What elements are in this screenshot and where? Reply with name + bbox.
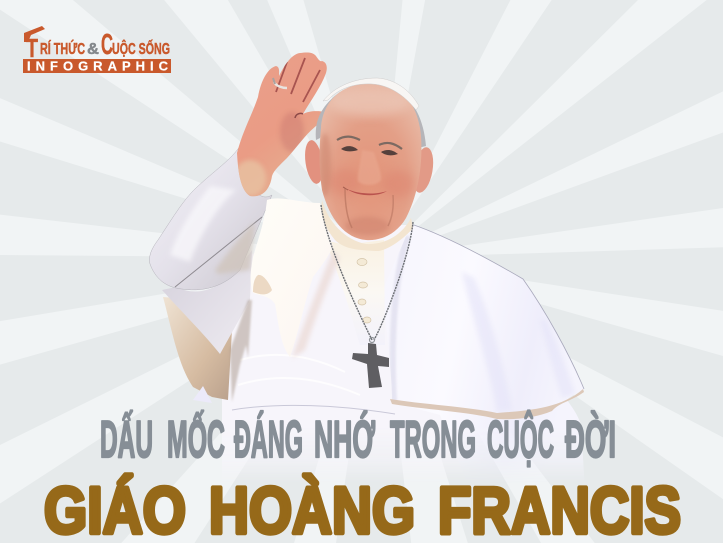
pectoral cross (352, 338, 389, 388)
sleeve highlights (170, 186, 236, 262)
title line 1: ĐỜI (565, 411, 616, 469)
ear left (303, 139, 325, 185)
title line 1 (100, 410, 616, 469)
ring (274, 82, 287, 88)
sleeve tip (193, 386, 212, 403)
portrait: Pope Francis waving (149, 52, 585, 490)
face (320, 83, 421, 240)
drape shadow (292, 250, 340, 358)
logo wordmark (26, 29, 170, 63)
head (303, 78, 436, 240)
logo wordmark: & (87, 41, 99, 58)
shadow folds near arm (230, 300, 252, 402)
logo wordmark: C (101, 29, 113, 61)
mantle folds (390, 236, 575, 412)
face shading (330, 88, 410, 116)
raised sleeve cuff (149, 146, 272, 290)
title line 1: DẤU (100, 410, 153, 469)
title line 1: CUỘC (487, 410, 554, 469)
sleeve underside (162, 250, 252, 354)
title line 1: NHỚ (314, 411, 375, 469)
logo banner (23, 59, 171, 73)
title line 1: TRONG (390, 411, 476, 469)
brows (337, 137, 360, 140)
logo wordmark: RÍ THỨC (40, 39, 85, 58)
logo: Tri Thuc & Cuoc Song Infographic: INFOGRAPHIC (27, 58, 169, 74)
mantle outer edge (411, 224, 584, 389)
eyes (341, 146, 358, 151)
robes (149, 146, 585, 490)
mouth (347, 189, 387, 195)
buttons (357, 258, 371, 323)
cassock waist ripple (232, 405, 395, 414)
lower sleeve lining (163, 297, 232, 400)
title line 1: MỐC (167, 410, 225, 469)
left drape (251, 198, 333, 357)
nose (358, 150, 381, 185)
right mantle (416, 226, 583, 466)
cassock body (222, 225, 460, 464)
hand shading (280, 112, 304, 152)
neck chain (321, 205, 413, 340)
title line 2 (44, 473, 681, 543)
ear right (410, 146, 436, 194)
zucchetto (323, 78, 419, 110)
logo wordmark: T (26, 33, 38, 63)
collar (322, 200, 413, 251)
hair (316, 92, 426, 148)
raised hand (234, 52, 332, 196)
mantle lining edge (390, 389, 584, 419)
logo roof mark (24, 26, 45, 42)
title line 1: ĐÁNG (234, 411, 303, 469)
logo: Tri Thuc & Cuoc Song Infographic (23, 26, 171, 74)
cassock front (330, 240, 384, 304)
title (44, 410, 681, 543)
logo wordmark: UỘC SỐNG (112, 38, 170, 58)
